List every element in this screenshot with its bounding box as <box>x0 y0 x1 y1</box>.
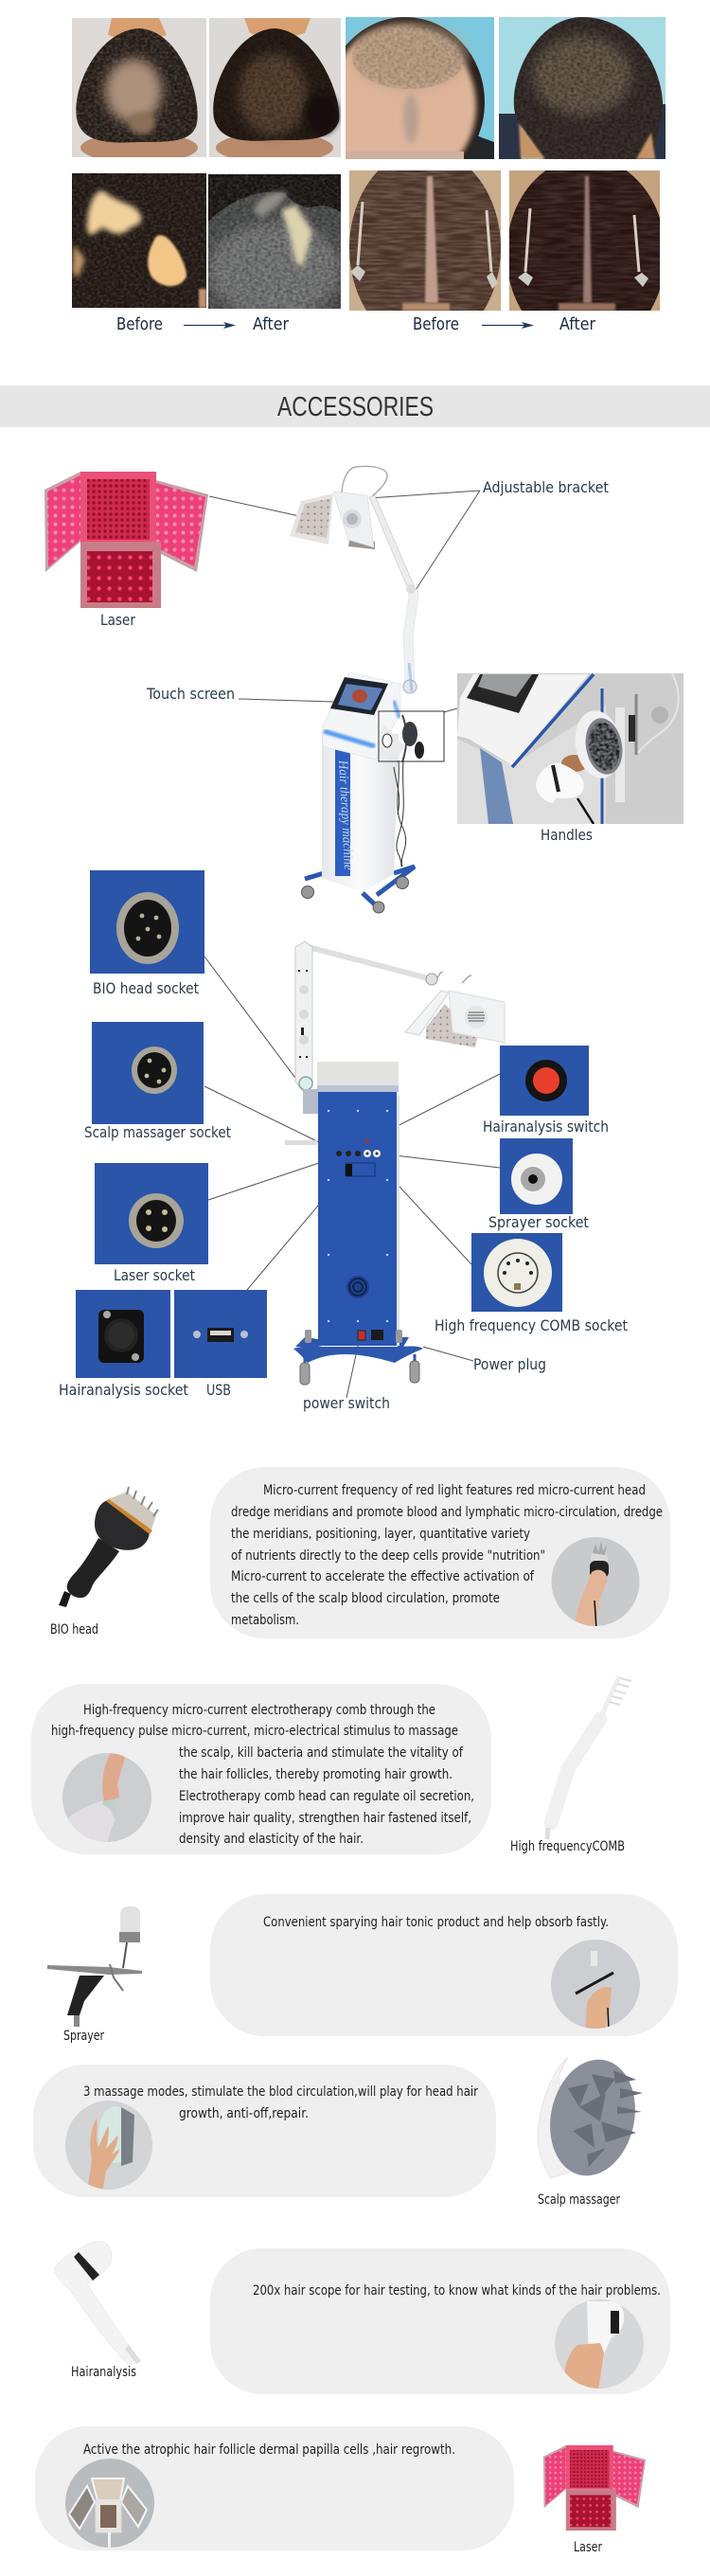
photo: before 3 <box>72 173 206 308</box>
icon: laser head with person <box>65 2459 154 2548</box>
label: high frequency comb socket: High frequency COMB socket <box>435 1316 628 1334</box>
text block 1: Micro-current to accelerate the effective activation of <box>231 1569 535 1584</box>
text block 1: the meridians, positioning, layer, quantitative variety <box>231 1527 530 1542</box>
icon: hand holding comb <box>62 1753 151 1842</box>
label: touch screen: Touch screen <box>146 685 235 703</box>
socket: usb <box>174 1290 267 1378</box>
icon: comb product <box>547 1676 631 1839</box>
pill 1 <box>210 1467 670 1638</box>
panel: scalp massager <box>33 2065 496 2197</box>
pill 5 <box>210 2248 670 2394</box>
label: adjustable bracket: Adjustable bracket <box>483 478 609 496</box>
icon: hairanalysis product <box>55 2242 141 2364</box>
label: scalp massager socket: Scalp massager socket <box>84 1123 231 1141</box>
label: power plug: Power plug <box>473 1355 546 1373</box>
inset box <box>379 711 444 761</box>
text 4: 3 massage modes, stimulate the blod circulation,will play for head hair <box>83 2084 478 2100</box>
socket: hairanalysis switch <box>500 1046 589 1116</box>
text block 2: high-frequency pulse micro-current, micro-electrical stimulus to massage <box>51 1724 458 1739</box>
callout lines sockets <box>204 957 500 1398</box>
photo: before 4 <box>349 170 501 311</box>
panel: bio head <box>210 1467 670 1638</box>
text 4 <box>83 2084 478 2121</box>
label: scalp massager: Scalp massager <box>538 2192 620 2208</box>
socket: sprayer <box>500 1138 573 1214</box>
label: hairanalysis: Hairanalysis <box>71 2365 136 2380</box>
text block 2: improve hair quality, strengthen hair fastened itself, <box>179 1811 471 1826</box>
machine text: Hair therapy machine <box>335 759 355 870</box>
socket: high frequency comb <box>471 1233 562 1312</box>
socket: scalp massager <box>92 1022 204 1124</box>
photo: after 2 <box>499 17 666 159</box>
heading band <box>0 385 710 427</box>
socket: laser <box>95 1163 208 1264</box>
photo: after 3 <box>208 174 341 317</box>
text block 1: the cells of the scalp blood circulation, promote <box>231 1591 500 1606</box>
pill 3 <box>210 1894 678 2036</box>
icon: sprayer product <box>47 1906 142 2027</box>
icon: hand holding scope <box>555 2299 644 2388</box>
label: bio head: BIO head <box>50 1622 98 1637</box>
panel: high frequency comb <box>31 1684 491 1854</box>
text block 1: Micro-current frequency of red light features red micro-current head <box>263 1483 646 1498</box>
pill 4 <box>33 2065 496 2197</box>
text 4: growth, anti-off,repair. <box>179 2106 309 2121</box>
arrow 1 <box>184 322 236 329</box>
text 6: Active the atrophic hair follicle dermal papilla cells ,hair regrowth. <box>83 2442 455 2458</box>
icon: laser product <box>543 2445 646 2531</box>
photo: handles <box>457 673 683 824</box>
text block 1 <box>231 1483 663 1628</box>
label: sprayer socket: Sprayer socket <box>488 1213 589 1231</box>
socket: hairanalysis <box>76 1290 170 1378</box>
label: handles: Handles <box>541 826 593 844</box>
after label 1: After <box>253 314 290 334</box>
text block 2: Electrotherapy comb head can regulate oil secretion, <box>179 1789 474 1804</box>
before label 1: Before <box>116 314 163 334</box>
socket: bio head <box>90 870 204 974</box>
text block 1: of nutrients directly to the deep cells provide "nutrition" <box>231 1548 545 1564</box>
photo: after 1 <box>209 18 341 163</box>
heading: accessories: ACCESSORIES <box>277 392 434 422</box>
pill 6 <box>35 2426 514 2550</box>
callout lines upper <box>209 491 480 712</box>
label: hairanalysis socket: Hairanalysis socket <box>59 1381 188 1399</box>
machine front view <box>290 466 424 913</box>
label: laser: Laser <box>574 2540 602 2555</box>
icon: scalp massager product <box>538 2051 646 2184</box>
photo: before 2 <box>346 17 494 159</box>
photo: after 4 <box>509 170 660 311</box>
icon: hand holding massager <box>65 2101 152 2190</box>
label: hairanalysis switch: Hairanalysis switch <box>483 1118 609 1136</box>
pill 2 <box>31 1684 491 1854</box>
text block 2: density and elasticity of the hair. <box>179 1832 364 1847</box>
label: power switch: power switch <box>303 1394 390 1412</box>
text 3: Convenient sparying hair tonic product and help obsorb fastly. <box>263 1915 609 1930</box>
text block 2: High-frequency micro-current electrotherapy comb through the <box>83 1703 435 1718</box>
after label 2: After <box>559 314 596 334</box>
laser panel <box>44 472 208 608</box>
text block 2 <box>51 1703 474 1847</box>
label: sprayer: Sprayer <box>63 2029 104 2044</box>
panel: sprayer <box>210 1894 678 2036</box>
arrow 2 <box>482 322 534 329</box>
label: bio head socket: BIO head socket <box>93 979 199 997</box>
machine rear view <box>285 941 505 1385</box>
text block 1: metabolism. <box>231 1613 299 1628</box>
icon: bio head product <box>59 1487 158 1607</box>
label: usb: USB <box>206 1381 231 1399</box>
label: laser: Laser <box>100 611 135 629</box>
icon: hand holding sprayer <box>551 1940 640 2029</box>
photo: before 1 <box>72 18 206 163</box>
panel: laser <box>35 2426 514 2552</box>
text block 2: the scalp, kill bacteria and stimulate the vitality of <box>179 1745 464 1761</box>
before label 2: Before <box>413 314 459 334</box>
label: high frequency comb: High frequencyCOMB <box>510 1839 625 1854</box>
panel: hairanalysis <box>210 2248 670 2394</box>
text block 2: the hair follicles, thereby promoting hair growth. <box>179 1767 453 1782</box>
label: laser socket: Laser socket <box>114 1266 195 1284</box>
icon: hand holding bio head <box>551 1537 640 1626</box>
